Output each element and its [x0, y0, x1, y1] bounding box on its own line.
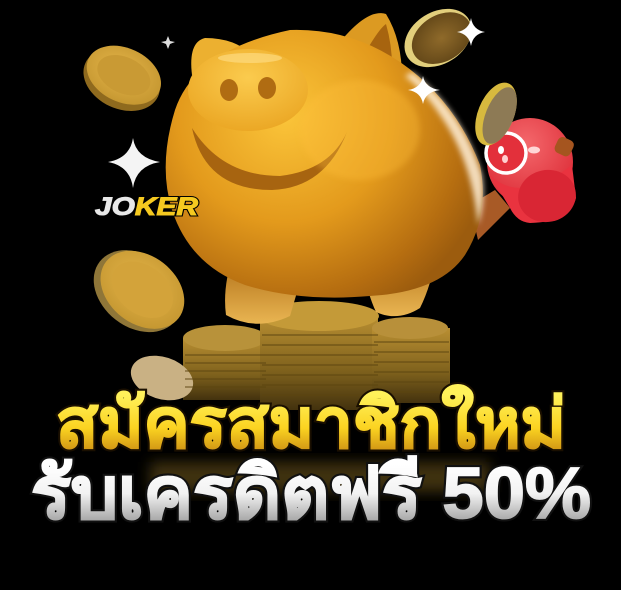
icon: gold piggy bank — [166, 13, 483, 324]
logo: JOKER: JO KER — [95, 193, 198, 221]
snout — [188, 49, 308, 131]
icon: sparkle left — [108, 138, 160, 188]
icon: hammer handle — [470, 190, 510, 240]
icon: sparkle small top — [161, 36, 175, 49]
left ear — [191, 38, 252, 75]
icon: sparkle right — [457, 18, 485, 46]
body — [166, 30, 483, 298]
icon: sparkle on pig shoulder — [408, 76, 440, 104]
icon: coin beside hammer — [467, 77, 525, 151]
body rim light — [405, 72, 483, 225]
icon: coin top left — [73, 34, 172, 123]
left leg — [225, 250, 305, 324]
icon: coin lower left — [78, 232, 200, 350]
icon: red hammer — [486, 118, 581, 227]
heading: line 1: สมัครสมาชิกใหม่ — [56, 384, 566, 462]
logo: JOKER: JO KER — [95, 193, 198, 221]
icon: coin top right — [394, 0, 482, 79]
heading: line 1: สมัครสมาชิกใหม่ — [56, 384, 566, 462]
right ear — [340, 13, 402, 78]
inner right ear — [368, 24, 392, 66]
heading: line 2: รับเครดิตฟรี 50% — [31, 454, 591, 534]
icon: coin stacks — [125, 301, 490, 492]
smile — [192, 128, 347, 190]
heading: line 2: รับเครดิตฟรี 50% — [31, 454, 591, 534]
right leg — [360, 240, 438, 316]
belly highlight — [300, 80, 420, 180]
